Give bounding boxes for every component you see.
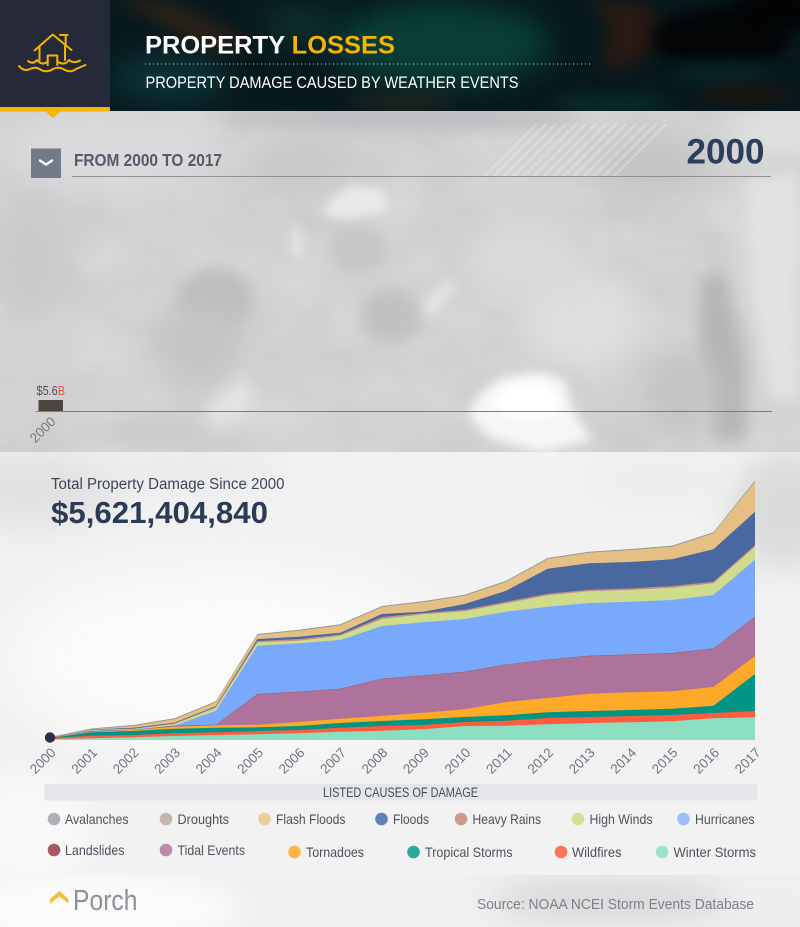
x axis labels: 2007 [317, 745, 349, 777]
legend: tidal events: Tidal Events [178, 842, 245, 858]
area: landslides [50, 617, 755, 740]
source: Source: NOAA NCEI Storm Events Database [477, 896, 754, 913]
legend heading [44, 784, 758, 800]
legend: hurricanes [677, 811, 754, 827]
logo: Porch [50, 885, 138, 917]
header banner [0, 0, 800, 118]
current year: 2000 [686, 132, 764, 172]
legend [44, 784, 758, 860]
logo: Porch: Porch [73, 885, 138, 917]
legend: heavy rains: Heavy Rains [472, 811, 541, 827]
area: avalanches and droughts outline [50, 480, 755, 740]
x axis labels: 2006 [276, 745, 308, 777]
area: tidal events [50, 617, 755, 740]
legend: tornadoes [288, 844, 364, 860]
x axis labels: 2003 [151, 745, 183, 777]
bar value: $5.6B [36, 383, 65, 398]
subtitle: PROPERTY DAMAGE CAUSED BY WEATHER EVENTS [146, 73, 518, 92]
legend heading: LISTED CAUSES OF DAMAGE [323, 785, 478, 800]
bar year label: 2000 [27, 414, 59, 446]
area: high winds [50, 547, 755, 740]
area: hurricanes [50, 560, 755, 740]
area: wildfires [50, 711, 755, 740]
title: PROPERTY LOSSES [145, 32, 395, 60]
icon: chevron box [31, 148, 61, 178]
x axis labels: 2001 [68, 745, 100, 777]
x axis labels: 2012 [525, 745, 556, 777]
chart start dot [45, 732, 55, 743]
area: winter storms [50, 717, 755, 740]
area: floods [50, 512, 755, 740]
x axis labels: 2016 [690, 745, 722, 777]
x axis labels: 2008 [359, 745, 391, 777]
bar chart: yearly damage [27, 383, 772, 446]
legend: droughts: Droughts [178, 811, 229, 827]
legend: floods: Floods [393, 811, 429, 827]
x axis labels: 2002 [110, 745, 142, 777]
x axis labels: 2011 [483, 745, 515, 777]
total damage: Total Property Damage Since 2000 [51, 476, 285, 493]
x axis labels [27, 745, 764, 777]
legend: avalanches: Avalanches [65, 811, 128, 827]
x axis labels: 2005 [234, 745, 266, 777]
legend: high winds: High Winds [590, 811, 652, 827]
x axis labels: 2009 [400, 745, 432, 777]
icon: flooded house [19, 34, 86, 71]
legend: wildfires: Wildfires [572, 844, 622, 860]
legend: floods [375, 811, 429, 827]
total damage [51, 476, 285, 530]
stacked area chart [27, 480, 764, 777]
legend: tropical storms: Tropical Storms [425, 844, 512, 860]
section heading: FROM 2000 TO 2017 [74, 150, 222, 170]
area: flash floods [50, 482, 755, 740]
x axis labels: 2014 [608, 745, 640, 777]
x axis labels: 2010 [442, 745, 473, 777]
x axis labels: 2000 [27, 745, 59, 777]
legend: flash floods: Flash Floods [276, 811, 346, 827]
section heading [31, 148, 771, 178]
legend: wildfires [555, 844, 622, 860]
area: heavy rains [50, 545, 755, 740]
total damage: $5,621,404,840 [51, 495, 268, 530]
hatching [484, 124, 667, 176]
legend: droughts [160, 811, 229, 827]
icon panel [0, 0, 110, 118]
legend: hurricanes: Hurricanes [695, 811, 754, 827]
area: tornadoes [50, 656, 755, 740]
legend: winter storms: Winter Storms [674, 844, 756, 860]
legend: tornadoes: Tornadoes [306, 844, 364, 860]
area: tropical storms [50, 674, 755, 740]
x axis labels: 2013 [566, 745, 598, 777]
legend: landslides: Landslides [65, 842, 124, 858]
x axis labels: 2017 [732, 745, 764, 777]
x axis labels: 2015 [649, 745, 681, 777]
x axis labels: 2004 [193, 745, 225, 777]
